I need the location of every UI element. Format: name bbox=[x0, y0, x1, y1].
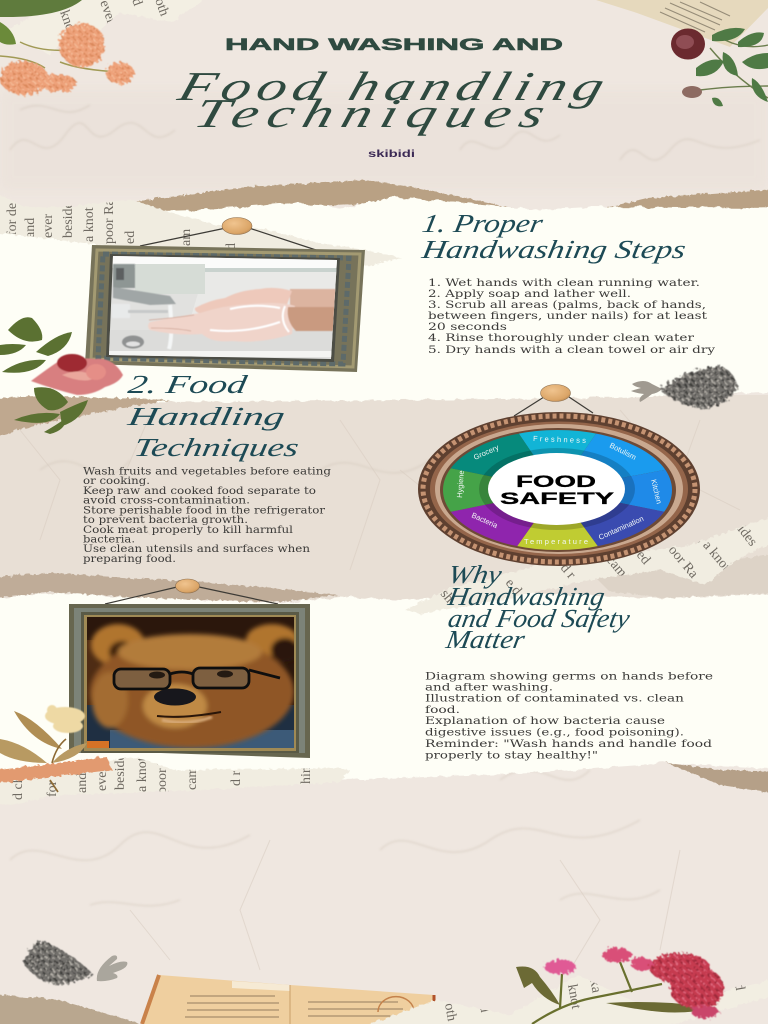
hands bbox=[290, 289, 338, 307]
newspaper strip: right of wheel: esides bbox=[727, 513, 760, 549]
newspaper strip: top section: poor Ra bbox=[102, 198, 117, 244]
steps text: 1. Wet hands with clean running water. bbox=[428, 277, 700, 289]
heading: hand washing and: HAND WASHING AND bbox=[225, 35, 563, 54]
explanation text: and after washing. bbox=[425, 682, 553, 694]
newspaper strip: lower left: a knot bbox=[135, 757, 150, 792]
wheel labels: Temperature bbox=[524, 537, 588, 546]
wheel labels: Grocery bbox=[472, 443, 500, 462]
techniques text bbox=[83, 466, 331, 565]
dried flower: lower left bbox=[0, 705, 87, 792]
newspaper strip: lower left: besides bbox=[113, 749, 128, 790]
wheel labels: Contamination bbox=[597, 514, 645, 542]
heading: Handwashing bbox=[445, 582, 607, 611]
explanation text: digestive issues (e.g., food poisoning). bbox=[425, 726, 684, 738]
techniques text: preparing food. bbox=[83, 553, 176, 565]
techniques text: or cooking. bbox=[83, 475, 150, 487]
open book: top right bbox=[596, 0, 768, 47]
flowers: top left bbox=[0, 0, 134, 95]
framed photo: hand washing bbox=[85, 218, 365, 372]
heading bbox=[124, 370, 301, 462]
newspaper strip: top section: besides bbox=[61, 197, 76, 238]
newspaper strip: lower left: d r bbox=[229, 770, 244, 786]
newspaper strip: lower left: and bbox=[75, 773, 90, 793]
newspaper strip: right of wheel: e d bbox=[502, 576, 524, 598]
icon: moth lower left bbox=[24, 941, 127, 984]
food safety wheel bbox=[418, 384, 700, 566]
newspaper strip: lower left: for bbox=[45, 780, 60, 797]
newspaper strip: top section bbox=[0, 201, 402, 266]
techniques text: avoid cross-contamination. bbox=[83, 494, 250, 506]
section 2: food handling techniques bbox=[83, 370, 331, 565]
heading bbox=[419, 209, 688, 264]
newspaper strip: right of wheel: , a knot bbox=[695, 533, 733, 575]
title bbox=[172, 35, 610, 160]
newspaper strip: lower left: poor Ra bbox=[155, 748, 170, 794]
techniques text: to prevent bacteria growth. bbox=[83, 514, 248, 526]
newspaper strip: bottom right: d bbox=[731, 982, 747, 992]
open book: bottom bbox=[142, 975, 434, 1024]
newspaper strip: top section: ever bbox=[41, 214, 56, 238]
explanation text: properly to stay healthy!" bbox=[425, 750, 598, 762]
wheel labels: Freshness bbox=[533, 434, 586, 445]
explanation text: food. bbox=[425, 704, 460, 716]
torn brown strip: left of section 2 bbox=[0, 396, 170, 440]
torn brown strip: left of section 3 bbox=[0, 573, 338, 602]
heading: and Food Safety bbox=[446, 604, 632, 633]
explanation text: Diagram showing germs on hands before bbox=[425, 670, 713, 682]
steps text: 2. Apply soap and lather well. bbox=[428, 288, 631, 300]
newspaper strip: top left corner bbox=[60, 0, 169, 30]
steps text: 3. Scrub all areas (palms, back of hands, bbox=[428, 299, 706, 311]
newspaper strip: bottom right bbox=[370, 981, 746, 1024]
newspaper strip: right of wheel: sh bbox=[437, 587, 456, 606]
techniques text: Wash fruits and vegetables before eating bbox=[83, 466, 331, 478]
newspaper strip: lower left bbox=[12, 757, 350, 800]
explanation text: Explanation of how bacteria cause bbox=[425, 715, 665, 727]
torn white panel: section 1 and 2 background bbox=[0, 197, 768, 402]
newspaper strip: top section: for de bbox=[5, 203, 20, 236]
newspaper strip: lower left: d ch bbox=[11, 776, 26, 800]
newspaper strip: right of wheel: oor Ra bbox=[665, 543, 701, 582]
techniques text: Cook meat properly to kill harmful bbox=[83, 524, 294, 536]
steps text: 5. Dry hands with a clean towel or air dry bbox=[428, 344, 715, 356]
newspaper strip: right of wheel: cam bbox=[603, 553, 629, 581]
heading: 2. Food bbox=[126, 370, 250, 399]
bear nose bbox=[154, 688, 221, 722]
author: skibidi bbox=[368, 149, 415, 160]
steps text: 20 seconds bbox=[428, 321, 507, 333]
heading: Handwashing Steps bbox=[419, 235, 688, 264]
newspaper strip: bottom right: oth bbox=[441, 1002, 459, 1022]
techniques text: bacteria. bbox=[83, 534, 135, 546]
wheel centre bbox=[488, 453, 625, 525]
newspaper strip: top section: am bbox=[179, 229, 194, 246]
newspaper strip: lower left: ever bbox=[95, 767, 110, 791]
wheel labels: Hygiene bbox=[455, 470, 466, 498]
wheel title: SAFETY bbox=[500, 489, 615, 508]
orange torn tape bbox=[0, 757, 112, 784]
newspaper strip: bottom right: d bbox=[476, 1004, 492, 1014]
heading: Techniques bbox=[132, 433, 301, 462]
newspaper strip: bottom right: Ra bbox=[586, 976, 604, 995]
wheel title bbox=[500, 472, 615, 508]
explanation text bbox=[425, 670, 713, 762]
torn brown strip: lower right bbox=[667, 763, 768, 795]
section 1: proper handwashing steps bbox=[419, 209, 715, 356]
green leaves bbox=[0, 0, 82, 45]
pin bbox=[176, 579, 200, 593]
newspaper strip: top section: a knot bbox=[82, 207, 97, 242]
framed portrait: bear bbox=[69, 579, 310, 758]
torn brown strip: bottom left bbox=[0, 993, 162, 1024]
icon: rose with leaves bbox=[0, 317, 123, 434]
wheel labels bbox=[455, 434, 664, 546]
heading: Handling bbox=[124, 402, 287, 431]
explanation text: Illustration of contaminated vs. clean bbox=[425, 692, 684, 704]
newspaper strip: right of wheel: d r bbox=[557, 561, 578, 582]
rose and sprig: top right bbox=[671, 28, 768, 106]
heading: Matter bbox=[443, 625, 528, 654]
heading bbox=[443, 560, 632, 654]
explanation text: Reminder: "Wash hands and handle food bbox=[425, 738, 712, 750]
heading: food handling: Food handling bbox=[172, 64, 610, 110]
icon: moth right bbox=[631, 366, 738, 409]
wheel labels: Bacteria bbox=[470, 511, 500, 530]
heading: 1. Proper bbox=[420, 209, 546, 238]
newspaper strip: top section: ed bbox=[123, 231, 138, 244]
steps text: between fingers, under nails) for at least bbox=[428, 310, 708, 322]
techniques text: Keep raw and cooked food separate to bbox=[83, 485, 316, 497]
newspaper strip: bottom right: knot bbox=[564, 983, 583, 1010]
newspaper strip: right of wheel: ed bbox=[633, 548, 653, 568]
newspaper strip: top section: and bbox=[23, 218, 38, 238]
bear glasses bbox=[114, 668, 280, 689]
heading: Why bbox=[446, 560, 504, 589]
pin bbox=[222, 218, 252, 234]
steps text: 4. Rinse thoroughly under clean water bbox=[428, 332, 695, 344]
heading: techniques: Techniques bbox=[189, 91, 550, 137]
torn brown strip: top bbox=[40, 180, 768, 218]
newspaper strip: lower left: him bbox=[299, 762, 314, 784]
techniques text: Store perishable food in the refrigerator bbox=[83, 504, 326, 516]
bear image bbox=[87, 617, 299, 748]
wheel title: FOOD bbox=[516, 472, 596, 491]
torn panel: section 3 background bbox=[0, 592, 768, 782]
newspaper strip: top section: d bbox=[224, 243, 239, 250]
wheel segments bbox=[440, 425, 675, 552]
newspaper strip: right of wheel bbox=[405, 510, 768, 614]
newspaper strip: top left corner: knot bbox=[56, 8, 79, 37]
steps text bbox=[428, 277, 715, 356]
flower: bottom right bbox=[516, 948, 724, 1024]
section 3: why handwashing and food safety matter bbox=[425, 560, 713, 762]
hand washing scene bbox=[109, 256, 337, 359]
wheel labels: Kitchen bbox=[649, 478, 664, 505]
torn beige strip: right of section 3 bbox=[590, 552, 768, 598]
wheel labels: Botulism bbox=[608, 441, 638, 462]
techniques text: Use clean utensils and surfaces when bbox=[83, 543, 310, 555]
newspaper strip: lower left: cam bbox=[185, 767, 200, 790]
pin bbox=[540, 384, 570, 402]
